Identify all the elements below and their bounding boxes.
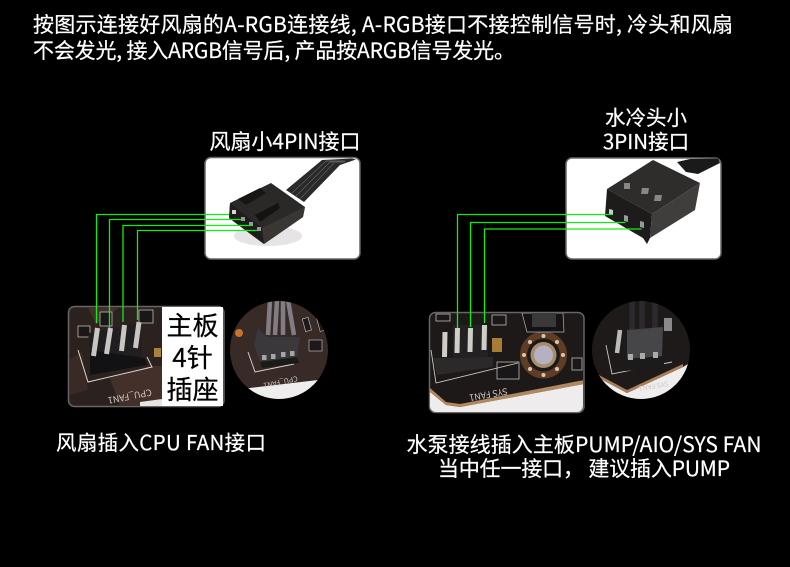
panel: round closeup of plugged pump header — [592, 300, 695, 400]
icon: gray wires — [268, 300, 294, 335]
caption: pump plug instruction — [406, 429, 762, 483]
callout: white label area: 主板 — [166, 306, 219, 343]
icon: copper traces — [69, 307, 162, 406]
icon: socket outline and base — [78, 323, 152, 382]
label: board silkscreen: CPU_FAN1 — [262, 373, 298, 390]
icon: wires — [286, 158, 356, 202]
icon: header pins — [444, 325, 484, 357]
icon: header pins — [94, 322, 139, 356]
panel: fan 4-pin connector photo — [205, 158, 360, 259]
caption: pump plug instruction: 水泵接线插入主板PUMP/AIO/SYS FAN — [406, 429, 762, 459]
icon: socket outline — [248, 352, 294, 372]
intro text — [33, 9, 733, 65]
icon: socket outline — [606, 345, 672, 374]
icon: small board components — [78, 310, 153, 337]
callout: white label area — [162, 306, 223, 407]
panel: motherboard 4-pin header photo — [68, 306, 224, 407]
icon: mounting hole — [522, 334, 565, 377]
wiring: green lines for fan connector — [96, 214, 258, 328]
caption: pump plug instruction: 当中任一接口， 建议插入PUMP — [438, 453, 730, 483]
panel: round closeup of plugged fan header — [230, 300, 330, 400]
heading: pump 3-pin connector: 水冷头小 — [605, 101, 687, 131]
icon: socket base — [431, 325, 518, 383]
caption: fan plug instruction: 风扇插入CPU FAN接口 — [56, 426, 266, 456]
intro text: 按图示连接好风扇的A-RGB连接线, A-RGB接口不接控制信号时, 冷头和风扇 — [33, 9, 733, 39]
icon: capacitor — [492, 338, 502, 352]
icon: black wires — [632, 300, 655, 330]
icon: small board components — [302, 315, 326, 351]
heading: pump 3-pin connector: 3PIN接口 — [603, 125, 689, 155]
icon: connector shadow — [234, 226, 302, 246]
heading: fan 4-pin connector: 风扇小4PIN接口 — [210, 126, 360, 156]
label: board silkscreen: SYS FAN1 — [638, 378, 669, 393]
icon: wires — [677, 158, 720, 174]
callout: white label area: 4针 — [172, 338, 213, 375]
icon: small board components — [436, 314, 582, 379]
callout: white label area: 插座 — [166, 370, 219, 407]
wiring: green lines for pump connector — [458, 214, 642, 328]
icon: 4-pin connector body — [229, 183, 305, 244]
icon: square chip — [522, 313, 564, 332]
intro text: 不会发光, 接入ARGB信号后, 产品按ARGB信号发光。 — [33, 35, 515, 65]
icon: 3-pin connector body — [605, 160, 700, 244]
panel: pump 3-pin connector photo — [566, 158, 721, 259]
icon: plugged connector — [254, 328, 300, 368]
label: board silkscreen: CPU_FAN1 — [107, 386, 153, 407]
icon: plugged connector — [625, 327, 664, 371]
panel: motherboard SYS FAN header photo — [430, 312, 584, 412]
label: board silkscreen: SYS FAN1 — [468, 385, 509, 405]
heading: pump 3-pin connector — [603, 101, 689, 155]
